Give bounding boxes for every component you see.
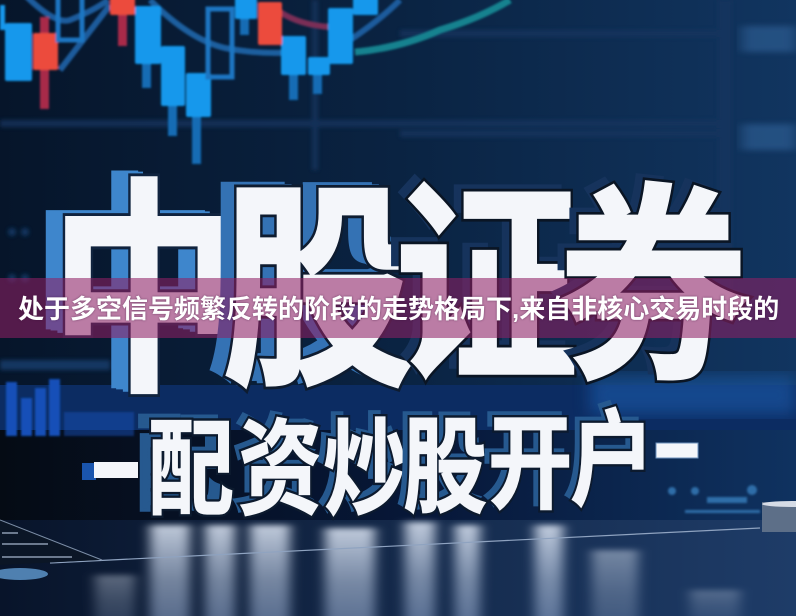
subtitle: 配资炒股开户: 资 [238, 412, 322, 529]
glyph: 证: 证 [395, 168, 578, 408]
subtitle: 配资炒股开户: 股 [397, 405, 481, 522]
blurred volume bars [6, 379, 134, 436]
subtitle: 配资炒股开户: 户 [570, 403, 654, 520]
glyph: 股: 股 [222, 169, 415, 414]
glyph: 券: 券 [558, 171, 749, 407]
dash right [656, 443, 698, 458]
knob left [0, 568, 48, 580]
glyph: 中: 中 [50, 166, 239, 421]
glyph: 券: 券 [558, 171, 749, 407]
subtitle: 配资炒股开户: 配 [148, 412, 234, 529]
subtitle: 配资炒股开户: 资 [232, 407, 316, 524]
caption band [0, 278, 796, 338]
subtitle: 配资炒股开户: 炒 [323, 412, 407, 529]
glyph: 中: 中 [42, 164, 231, 419]
blurred axis labels [742, 26, 796, 150]
subtitle: 配资炒股开户: 资 [238, 412, 322, 529]
subtitle: 配资炒股开户: 炒 [323, 412, 407, 529]
glyph: 中: 中 [35, 162, 225, 416]
subtitle: 配资炒股开户: 户 [570, 403, 654, 520]
glyph: 券: 券 [549, 165, 740, 401]
glyph: 股: 股 [213, 165, 406, 410]
subtitle: 配资炒股开户: 开 [482, 402, 566, 517]
candlestick chart [0, 0, 510, 164]
glyph: 证: 证 [386, 162, 569, 402]
subtitle: 配资炒股开户: 股 [403, 410, 487, 527]
dash left [82, 462, 138, 480]
reflective table [0, 520, 796, 616]
subtitle: 配资炒股开户 [82, 398, 698, 529]
subtitle: 配资炒股开户: 开 [488, 407, 572, 522]
glyph: 中: 中 [50, 166, 239, 421]
subtitle: 配资炒股开户: 配 [148, 412, 234, 529]
knob right [762, 501, 796, 532]
subtitle: 配资炒股开户: 户 [564, 398, 648, 515]
glyph: 证: 证 [395, 168, 578, 408]
caption text: 处于多空信号频繁反转的阶段的走势格局下,来自非核心交易时段的 [18, 294, 779, 324]
subtitle: 配资炒股开户: 配 [136, 407, 222, 524]
subtitle: 配资炒股开户: 开 [488, 407, 572, 522]
subtitle: 配资炒股开户: 股 [403, 410, 487, 527]
big title: 中股证券 [31, 160, 749, 421]
keyboard [0, 520, 102, 565]
glyph: 中: 中 [31, 160, 220, 415]
subtitle: 配资炒股开户: 炒 [317, 407, 401, 524]
glyph: 股: 股 [222, 169, 415, 414]
glyph: 股: 股 [206, 163, 399, 408]
